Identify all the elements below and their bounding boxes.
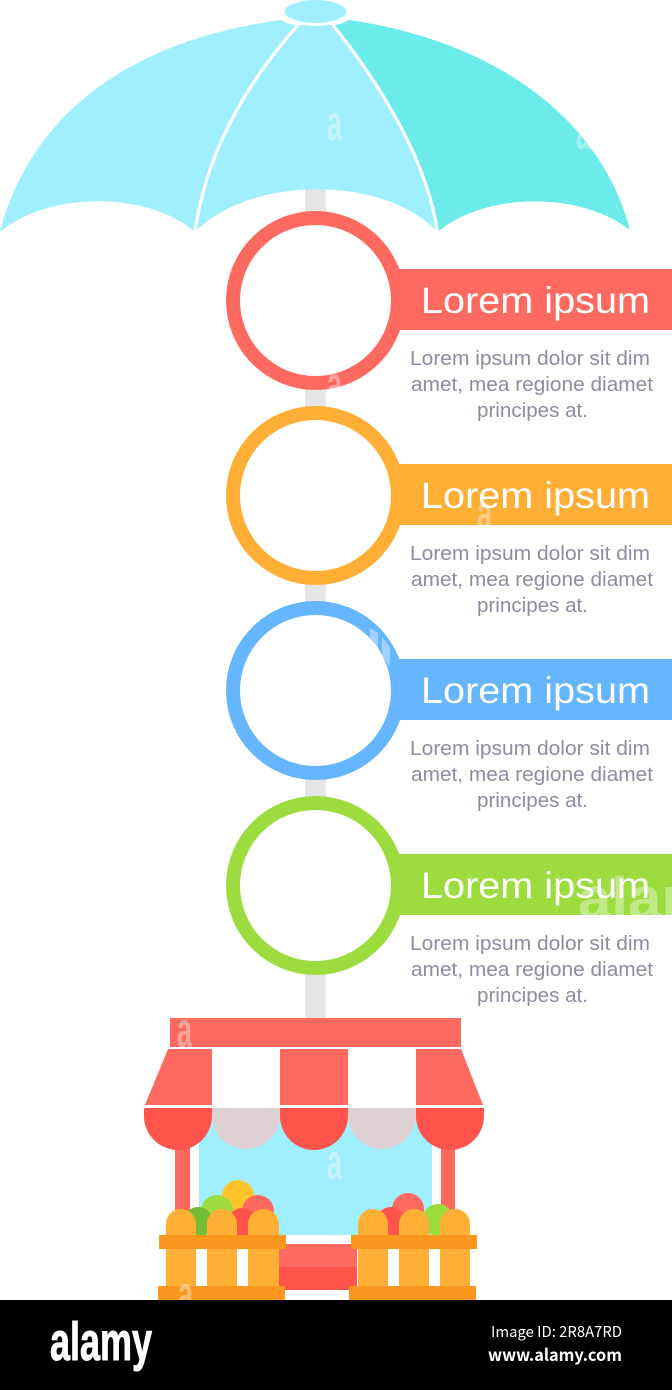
stall window — [199, 1118, 432, 1235]
stall step — [279, 1244, 357, 1290]
fruit pile left — [183, 1180, 274, 1237]
step 4 ring — [233, 803, 398, 968]
step 1 description — [410, 348, 653, 422]
step 1 heading: Lorem ipsum — [421, 280, 650, 321]
website: www.alamy.com — [488, 1342, 622, 1366]
watermark marks: a — [178, 1266, 194, 1322]
step 4 banner — [395, 854, 672, 915]
step 2 description — [410, 543, 653, 617]
umbrella left panel — [0, 20, 298, 232]
step 1 — [233, 218, 672, 422]
umbrella centre panel — [195, 25, 438, 232]
left fence — [158, 1209, 286, 1300]
step 3 description: Lorem ipsum dolor sit dim — [410, 738, 650, 760]
watermark marks: a — [327, 95, 343, 151]
step 3 — [233, 608, 672, 812]
step 2 description: amet, mea regione diamet — [411, 569, 653, 591]
umbrella ribs — [195, 25, 438, 232]
awning stripes — [145, 1049, 483, 1105]
footer bar — [0, 1300, 672, 1390]
step 1 description: Lorem ipsum dolor sit dim — [410, 348, 650, 370]
awning grey scallops — [212, 1108, 416, 1149]
step 3 banner — [395, 659, 672, 720]
watermark marks: a — [576, 104, 592, 160]
step 1 ring — [233, 218, 398, 383]
pole — [305, 185, 326, 1020]
umbrella canopy — [0, 0, 630, 232]
watermark marks: a — [327, 1134, 343, 1190]
umbrella right panel — [333, 20, 630, 232]
step 4 — [233, 803, 672, 1007]
step 2 — [233, 413, 672, 617]
step 3 description: amet, mea regione diamet — [411, 764, 653, 786]
awning red scallops — [144, 1108, 484, 1150]
market stall — [144, 1018, 484, 1300]
watermark marks: a — [327, 356, 343, 412]
image id: Image ID: 2R8A7RD — [491, 1321, 622, 1342]
watermark marks — [177, 95, 672, 1322]
stall roof bar — [170, 1018, 461, 1047]
step 4 description — [410, 933, 653, 1007]
step 3 ring — [233, 608, 398, 773]
step 4 description: amet, mea regione diamet — [411, 959, 653, 981]
stall posts — [175, 1145, 455, 1220]
alamy logo: alamy — [50, 1312, 152, 1372]
step 1 description: principes at. — [477, 400, 588, 422]
watermark marks: a — [177, 1002, 193, 1058]
step 4 heading: Lorem ipsum — [421, 865, 650, 906]
right fence — [349, 1209, 477, 1300]
step 2 description: principes at. — [477, 595, 588, 617]
step 2 description: Lorem ipsum dolor sit dim — [410, 543, 650, 565]
step 4 description: principes at. — [477, 985, 588, 1007]
step 3 description — [410, 738, 653, 812]
step 4 description: Lorem ipsum dolor sit dim — [410, 933, 650, 955]
step 1 description: amet, mea regione diamet — [411, 374, 653, 396]
step 3 description: principes at. — [477, 790, 588, 812]
step 1 banner — [395, 269, 672, 330]
step 2 ring — [233, 413, 398, 578]
watermark marks: a — [477, 485, 493, 541]
step 2 banner — [395, 464, 672, 525]
umbrella cap — [283, 0, 348, 24]
step 3 heading: Lorem ipsum — [421, 670, 650, 711]
fruit pile right — [376, 1193, 454, 1237]
step 2 heading: Lorem ipsum — [421, 475, 650, 516]
